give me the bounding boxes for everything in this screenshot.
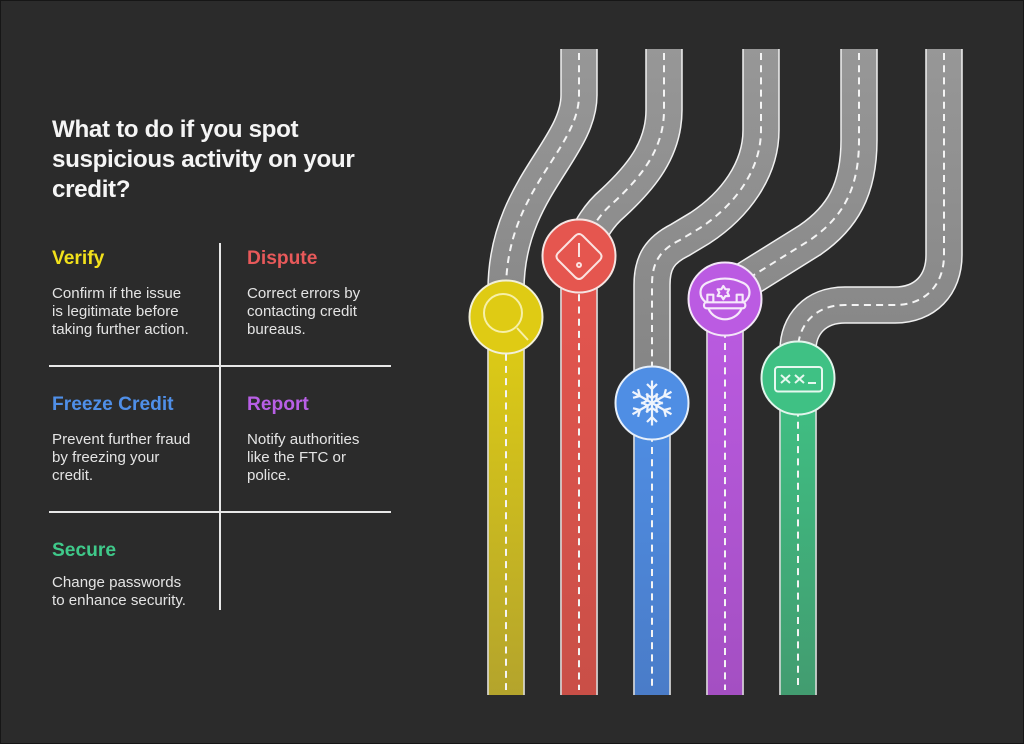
text block: Dispute: Dispute [247, 248, 317, 268]
text block: Secure: to enhance security. [52, 592, 186, 609]
text block: Verify: Verify [52, 248, 104, 268]
text block: Dispute: bureaus. [247, 321, 306, 338]
text block: Report [247, 394, 359, 484]
icon: police cap [688, 262, 762, 336]
road: Dispute [579, 49, 664, 695]
icon: warning diamond [542, 220, 616, 292]
text block: Freeze Credit: credit. [52, 467, 93, 484]
text block: Verify: Confirm if the issue [52, 285, 181, 302]
text block: Freeze Credit: by freezing your [52, 449, 159, 466]
road: Freeze Credit [652, 49, 761, 695]
text block: Report: like the FTC or [247, 449, 346, 466]
road: Verify [506, 49, 579, 695]
text block: Freeze Credit: Prevent further fraud [52, 431, 190, 448]
icon: password terminal [762, 342, 834, 414]
text block: Report: Report [247, 394, 309, 414]
text block: Freeze Credit: Freeze Credit [52, 394, 174, 414]
text block: Verify: taking further action. [52, 321, 189, 338]
text block: Dispute: Correct errors by [247, 285, 360, 302]
text block: Report: police. [247, 467, 291, 484]
text block: Secure [52, 540, 186, 609]
text block: Freeze Credit [52, 394, 190, 484]
text block: Dispute [247, 248, 360, 338]
road: Report [725, 49, 859, 695]
text block: Verify [52, 248, 189, 338]
road: Secure [798, 49, 944, 695]
title: What to do if you spot suspicious activity on your credit? [52, 116, 354, 203]
text block: Report: Notify authorities [247, 431, 359, 448]
icon: magnifier [470, 280, 542, 354]
text block: Dispute: contacting credit [247, 303, 357, 320]
text block: Verify: is legitimate before [52, 303, 179, 320]
text block: Secure: Change passwords [52, 574, 181, 591]
icon: snowflake [616, 366, 688, 440]
text block: Secure: Secure [52, 540, 116, 560]
